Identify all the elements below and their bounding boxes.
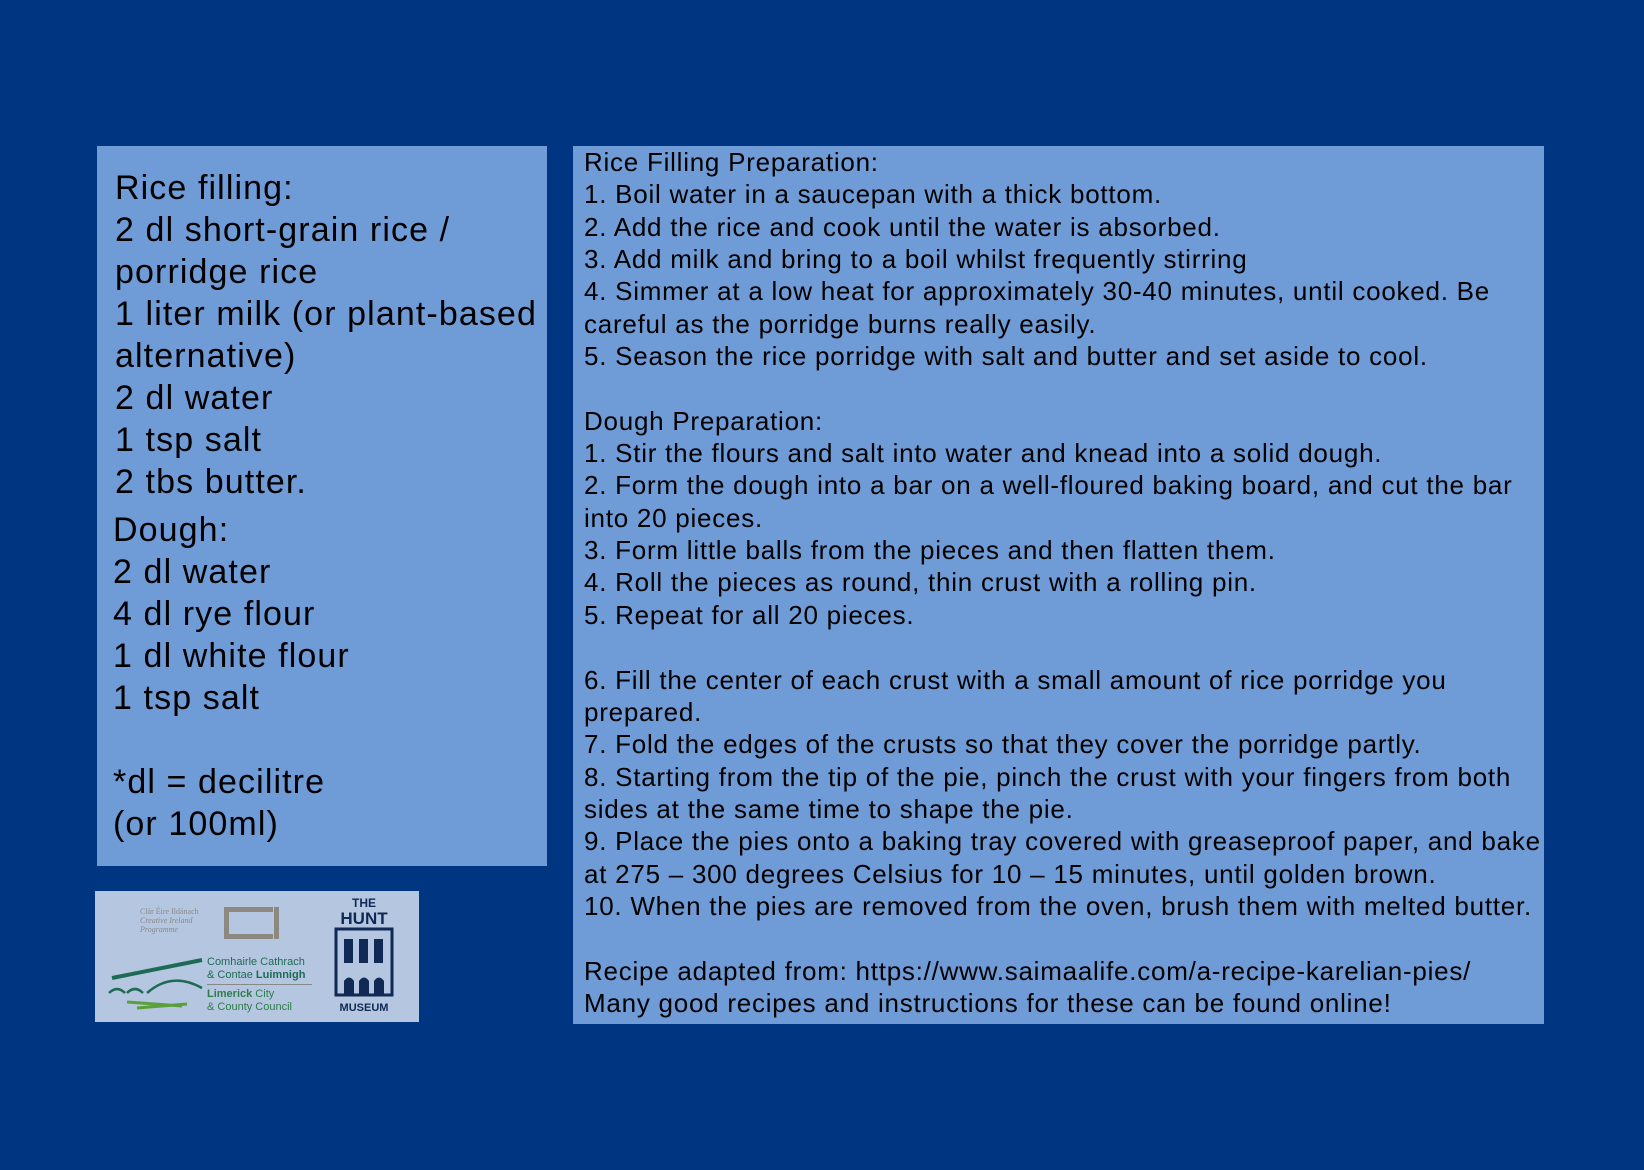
logo: limerick council: & Contae Luimnigh (207, 969, 305, 981)
logo: hunt museum: MUSEUM (340, 1002, 388, 1014)
logo: creative ireland: Creative Ireland (140, 916, 193, 925)
text: preparation steps: Rice Filling Preparation: 1. Boil water in a saucepan with a thick bottom. 2. Add the rice and cook until the water is absorbed. 3. Add milk and bring to a boil whilst frequently stirring 4. Simmer at a low heat for approximately 30-40 minutes, until cooked. Be careful as the porridge burns really easily. 5. Season the rice porridge with salt and butter and set aside to cool. Dough Preparation: 1. Stir the flours and salt into water and knead into a solid dough. 2. Form the dough into a bar on a well-floured baking board, and cut the bar into 20 pieces. 3. Form little balls from the pieces and then flatten them. 4. Roll the pieces as round, thin crust with a rolling pin. 5. Repeat for all 20 pieces. 6. Fill the center of each crust with a small amount of rice porridge you prepared. 7. Fold the edges of the crusts so that they cover the porridge partly. 8. Starting from the tip of the pie, pinch the crust with your fingers from both sides at the same time to shape the pie. 9. Place the pies onto a baking tray covered with greaseproof paper, and bake at 275 – 300 degrees Celsius for 10 – 15 minutes, until golden brown. 10. When the pies are removed from the oven, brush them with melted butter. Recipe adapted from: https://www.saimaalife.com/a-recipe-karelian-pies/ Many good recipes and instructions for these can be found online! (584, 147, 1541, 1018)
logo: limerick council: & County Council (207, 1001, 292, 1013)
text: rice filling ingredients: Rice filling: 2 dl short-grain rice / porridge rice 1 liter milk (or plant-based alternative) 2 dl water 1 tsp salt 2 tbs butter. (115, 169, 537, 501)
logo: limerick council (108, 956, 312, 1013)
panel: method (573, 146, 1544, 1024)
logos box (95, 891, 419, 1022)
logo: hunt museum (334, 896, 394, 1014)
logo: creative ireland: Programme (140, 925, 178, 934)
text: dough ingredients: Dough: 2 dl water 4 dl rye flour 1 dl white flour 1 tsp salt *dl = decilitre (or 100ml) (113, 511, 350, 843)
logo: hunt museum: HUNT (340, 909, 388, 928)
logo: limerick council: Limerick City (207, 988, 274, 1000)
logo: creative ireland: Clár Éire Ildánach (140, 907, 199, 916)
logo: creative ireland (140, 906, 279, 939)
panel: ingredients (97, 146, 547, 866)
logo: hunt museum: THE (352, 896, 376, 910)
logo: limerick council: Comhairle Cathrach (207, 956, 305, 968)
